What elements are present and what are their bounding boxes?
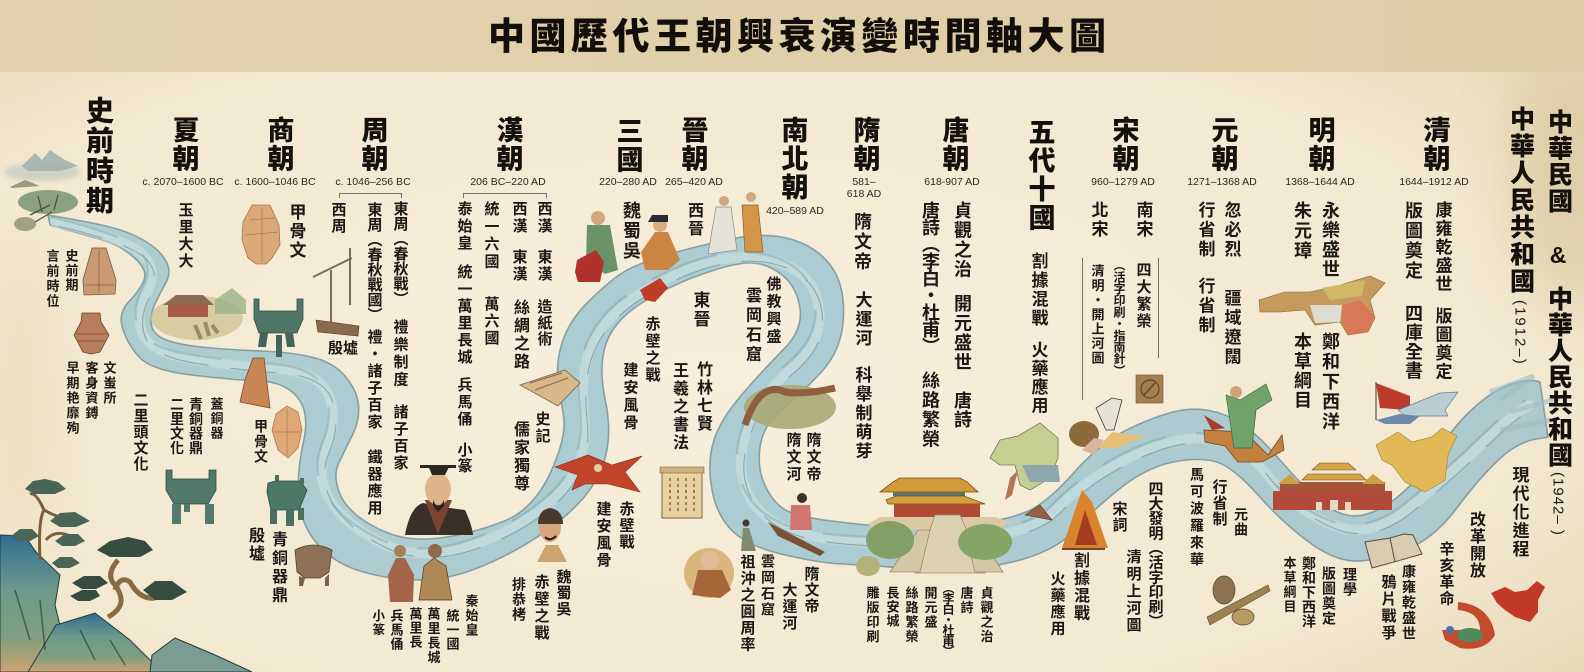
text: 四大發明（活字印刷）: 四大發明（活字印刷）: [1146, 481, 1164, 628]
icon: war bonfire: [1062, 490, 1108, 549]
date: Three Kingdoms: 220–280 AD: [599, 176, 657, 188]
text: 竹林七賢: 竹林七賢: [694, 361, 711, 433]
icon: oracle bone fragment: [240, 358, 270, 408]
text: 小篆: 小篆: [456, 442, 472, 474]
text: 雲岡石窟: 雲岡石窟: [743, 287, 760, 365]
heading: 周朝: 周朝: [358, 116, 388, 173]
date: Sui: 581–: [852, 176, 876, 188]
text: 二里頭文化: 二里頭文化: [132, 392, 148, 472]
text: 萬六國: 萬六國: [482, 296, 500, 347]
heading: ampersand: &: [1550, 242, 1566, 268]
date: 1942: (1942– ): [1550, 472, 1566, 536]
text: 雲岡石窟 lower: 雲岡石窟: [760, 554, 776, 618]
icon: Qin minister figure: [419, 544, 452, 600]
text: 四大繁榮: 四大繁榮: [1134, 262, 1152, 330]
icon: prehistoric stone axe: [83, 248, 116, 295]
icon: Five Dynasties map: [990, 423, 1060, 520]
text: （活字印刷・指南針）: （活字印刷・指南針）: [1112, 259, 1126, 376]
text: 割據混戰: 割據混戰: [1028, 252, 1048, 328]
line: Song divider left: [1082, 258, 1083, 400]
text: 清明・開上河圖: 清明・開上河圖: [1090, 264, 1104, 366]
text: 魏蜀吳: 魏蜀吳: [621, 201, 641, 261]
text: 史前期: 史前期: [64, 249, 78, 292]
text: 早期艳靡殉: 早期艳靡殉: [64, 361, 80, 436]
text: 西周: 西周: [330, 202, 346, 234]
icon: red China map: [1491, 581, 1545, 622]
text: 鴉片戰爭: 鴉片戰爭: [1380, 574, 1396, 642]
heading: 中華民國: 中華民國: [1544, 109, 1572, 214]
date: Ming: 1368–1644 AD: [1285, 176, 1355, 188]
icon: Erlitou palace site scene: [151, 288, 246, 340]
text: 隋文帝: 隋文帝: [852, 212, 872, 272]
icon: Bamboo Grove scholars: [708, 192, 763, 254]
text: 絲路繁榮 lower: 絲路繁榮: [904, 586, 918, 644]
text: 南宋: 南宋: [1134, 201, 1152, 239]
text: 清明上河圖: 清明上河圖: [1124, 549, 1142, 634]
icon: open book Compendium of Materia Medica: [1365, 534, 1422, 568]
icon: Ming territory map: [1259, 276, 1385, 335]
text: 行省制 lower: 行省制: [1210, 479, 1228, 527]
text: 鐵器應用: 鐵器應用: [366, 449, 382, 517]
date: Han: 206 BC–220 AD: [470, 176, 546, 188]
heading: 夏朝: 夏朝: [168, 116, 198, 173]
date: Zhou: c. 1046–256 BC: [335, 176, 411, 188]
title: 中國歷代王朝興衰演變時間軸大圖: [488, 16, 1110, 57]
text: 造紙術: 造紙術: [536, 299, 552, 347]
text: 禮・諸子百家: 禮・諸子百家: [366, 329, 382, 431]
date: Sui: [847, 176, 881, 200]
text: 赤壁戰: 赤壁戰: [618, 501, 634, 550]
text: 行省制 A: 行省制: [1196, 201, 1214, 260]
text: 甲骨文 lower: 甲骨文: [253, 419, 269, 464]
text: 火藥應用 lower: 火藥應用: [1048, 571, 1066, 637]
icon: oracle bone inscription: [272, 406, 302, 458]
text: 馬可波羅來華: 馬可波羅來華: [1189, 467, 1205, 569]
icon: Song flying lady: [1069, 398, 1145, 455]
text: 小篆 lower: 小篆: [370, 609, 384, 637]
text: 甲骨文: 甲骨文: [286, 203, 306, 260]
icon: Yinxu well sweep: [313, 248, 359, 336]
text: 言前時位: 言前時位: [44, 249, 60, 309]
heading: 中華人民共和國 right column: 中華人民共和國: [1544, 286, 1572, 468]
text: 諸子百家: 諸子百家: [392, 404, 408, 472]
icon: Tang palace: [856, 478, 1015, 576]
icon: Red Cliffs war banner: [555, 455, 642, 492]
text: 東漢 A: 東漢: [536, 249, 552, 283]
text: 祖沖之圓周率: 祖沖之圓周率: [738, 554, 756, 653]
text: 康雍乾盛世: 康雍乾盛世: [1432, 201, 1452, 294]
text: 理學: 理學: [1342, 567, 1358, 597]
text: 貞觀之治 lower: 貞觀之治: [978, 586, 994, 644]
icon: modern China map yellow: [1376, 428, 1457, 492]
text: 朱元璋: 朱元璋: [1292, 201, 1312, 261]
text: 絲綢之路: 絲綢之路: [511, 299, 528, 371]
text: 開元盛世: 開元盛世: [952, 294, 972, 372]
icon: left landscape mountains: [0, 535, 252, 672]
text: 史記: 史記: [534, 411, 550, 445]
text: 秦始皇 lower: 秦始皇: [464, 594, 478, 638]
icon: Cao Cao bust portrait: [537, 508, 567, 562]
text: 赤壁之戰: 赤壁之戰: [644, 316, 660, 384]
date: Song: 960–1279 AD: [1091, 176, 1155, 188]
icon: seated orange-robed scholar: [641, 215, 680, 270]
text: 宋詞: 宋詞: [1110, 501, 1128, 533]
icon: left pine tree: [11, 479, 90, 568]
icon: brown tripod cauldron: [295, 545, 332, 586]
text: 魏蜀吳 lower: 魏蜀吳: [554, 569, 572, 617]
text: 青銅器鼎 lower: 青銅器鼎: [269, 531, 286, 605]
date: Tang: 618-907 AD: [924, 176, 980, 188]
date: 1912: (1912–): [1512, 300, 1528, 366]
text: 四庫全書: 四庫全書: [1403, 304, 1423, 380]
text: 兵馬俑: 兵馬俑: [456, 377, 472, 428]
text: 西晉: 西晉: [685, 202, 702, 238]
text: 佛教興盛: 佛教興盛: [764, 276, 782, 346]
text: 絲路繁榮: 絲路繁榮: [920, 371, 940, 449]
text: 殷墟: 殷墟: [246, 527, 263, 563]
text: 鄭和下西洋 lower: 鄭和下西洋: [1301, 556, 1317, 628]
text: 版圖奠定 lower: 版圖奠定: [1321, 566, 1337, 626]
text: 隋文帝 lower: 隋文帝: [802, 566, 820, 614]
icon: Song compass and ruler: [1207, 576, 1270, 625]
icon: pine grove at river source: [14, 190, 78, 231]
date: Qing: 1644–1912 AD: [1399, 176, 1469, 188]
text: 康雍乾盛世 lower: 康雍乾盛世: [1401, 564, 1417, 642]
text: 隋文河: 隋文河: [784, 432, 802, 483]
icon: dragon with red flag emblem: [1442, 602, 1495, 649]
heading: 隋朝: 隋朝: [850, 116, 880, 173]
text: 唐詩（李白・杜甫）: 唐詩（李白・杜甫）: [920, 201, 940, 354]
icon: small monk figure: [741, 520, 756, 551]
heading: 晉朝: 晉朝: [678, 116, 708, 173]
bracket: Zhou: [339, 193, 402, 198]
text: 統一萬里長城: 統一萬里長城: [456, 264, 472, 366]
text: 東周（春秋戰）: 東周（春秋戰）: [392, 201, 408, 306]
icon: terracotta soldier: [388, 545, 414, 602]
heading: 五代十國: 五代十國: [1024, 118, 1054, 232]
heading: 三國: 三國: [612, 117, 642, 174]
text: 版圖奠定 A: 版圖奠定: [1403, 201, 1423, 281]
icon: painted clay pot: [74, 313, 109, 354]
heading: 中華人民共和國 left column: 中華人民共和國: [1506, 106, 1534, 295]
text: 割據混戰 lower: 割據混戰: [1071, 552, 1088, 622]
date: Xia: c. 2070–1600 BC: [142, 176, 224, 188]
text: 西漢 A: 西漢: [536, 201, 552, 235]
text: 萬里長: 萬里長: [408, 607, 422, 649]
heading: 元朝: 元朝: [1208, 116, 1238, 173]
icon: Song compass tile: [1136, 375, 1163, 403]
text: 蓋銅器: 蓋銅器: [208, 397, 224, 440]
icon: modern flag and airplane: [1376, 382, 1458, 424]
icon: distant misty mountains: [4, 150, 80, 188]
text: 赤壁之戰 lower: 赤壁之戰: [532, 574, 550, 642]
heading: 唐朝: 唐朝: [938, 116, 968, 173]
heading: 史前時期: 史前時期: [83, 96, 114, 216]
heading: 商朝: 商朝: [264, 116, 294, 173]
text: 雕版印刷: 雕版印刷: [864, 586, 880, 644]
title band: [0, 0, 1584, 72]
icon: right pine tree: [70, 537, 187, 617]
text: 唐詩: 唐詩: [952, 391, 972, 429]
text: 文蚩所: 文蚩所: [102, 361, 116, 406]
text: 大運河 lower: 大運河: [780, 582, 798, 632]
text: 本草綱目 lower: 本草綱目: [1282, 556, 1296, 614]
icon: Great Wall: [744, 385, 836, 429]
text: 行省制 B: 行省制: [1196, 277, 1214, 336]
text: 大運河: 大運河: [852, 291, 872, 348]
date: Sui: 618 AD: [847, 188, 881, 200]
text: 兵馬俑 lower: 兵馬俑: [388, 609, 404, 651]
icon: hanging scroll: [660, 467, 704, 518]
icon: round bronze ding: [166, 470, 216, 524]
text: 青銅器鼎: 青銅器鼎: [188, 397, 204, 455]
heading: 南北朝: 南北朝: [778, 116, 808, 202]
line: Song divider right: [1158, 258, 1159, 358]
icon: Bamboo book Shiji: [520, 370, 580, 406]
text: 東周（春秋戰國）: 東周（春秋戰國）: [366, 202, 382, 322]
icon: Tiananmen gate: [1273, 463, 1392, 510]
icon: Emperor Qin Shi Huang portrait: [405, 465, 473, 535]
text: 建安風骨 lower: 建安風骨: [594, 501, 612, 569]
text: 泰始皇: 泰始皇: [456, 201, 472, 252]
date: Jin: 265–420 AD: [665, 176, 723, 188]
text: 鄭和下西洋: 鄭和下西洋: [1320, 332, 1340, 432]
icon: bronze ding tripod: [254, 299, 303, 357]
text: 北宋: 北宋: [1088, 201, 1108, 239]
text: 西漢 B: 西漢: [510, 201, 528, 235]
text: 唐詩 lower: 唐詩: [958, 586, 974, 615]
text: 隋文帝 river: 隋文帝: [804, 432, 822, 483]
text: 長安城: 長安城: [884, 586, 900, 628]
heading: 漢朝: 漢朝: [492, 116, 522, 173]
text: 改革開放: 改革開放: [1467, 511, 1484, 579]
text: 排恭栲: 排恭栲: [511, 577, 527, 622]
text: 客身資鎛: 客身資鎛: [84, 361, 98, 421]
text: 統一國: 統一國: [444, 609, 460, 651]
text: 統一六國: 統一六國: [482, 201, 500, 271]
text: 萬里長城 lower: 萬里長城: [426, 607, 440, 665]
text: 殷墟 horizontal: 殷墟: [328, 340, 358, 357]
text: （李白・杜甫） lower: （李白・杜甫）: [941, 582, 955, 656]
heading: 清朝: 清朝: [1420, 116, 1450, 173]
river: [48, 215, 1560, 580]
icon: Yuan warrior on horse: [1204, 384, 1284, 462]
text: 火藥應用: 火藥應用: [1028, 341, 1048, 415]
text: 禮樂制度: 禮樂制度: [392, 319, 408, 389]
text: 貞觀之治: 貞觀之治: [952, 201, 972, 279]
text: 建安風骨: 建安風骨: [622, 362, 638, 432]
text: 儒家獨尊: 儒家獨尊: [511, 421, 528, 493]
text: 開元盛: 開元盛: [922, 586, 938, 630]
bracket: Han: [463, 193, 547, 198]
date: Shang: c. 1600–1046 BC: [234, 176, 316, 188]
text: 現代化進程: 現代化進程: [1510, 466, 1528, 558]
heading: 明朝: 明朝: [1304, 116, 1334, 173]
text: 疆域遼闊: 疆域遼闊: [1222, 289, 1240, 367]
icon: oracle bone turtle shell: [242, 205, 280, 264]
icon: Zu Chongzhi portrait medallion: [684, 548, 734, 598]
text: 東漢 B: 東漢: [510, 249, 528, 283]
text: 科舉制萌芽: 科舉制萌芽: [852, 366, 872, 461]
icon: Three Kingdoms official with red chest: [575, 211, 618, 282]
text: 東晉: 東晉: [690, 291, 710, 329]
date: Northern and Southern: 420–589 AD: [766, 205, 824, 217]
text: 忽必烈: 忽必烈: [1222, 201, 1240, 260]
icon: Sui emperor on canal boat: [768, 493, 825, 556]
heading: 宋朝: 宋朝: [1108, 116, 1138, 173]
text: 王羲之書法: 王羲之書法: [670, 362, 687, 452]
icon: square bronze ding: [267, 475, 307, 526]
text: 永樂盛世: 永樂盛世: [1320, 201, 1340, 279]
text: 元曲: 元曲: [1233, 507, 1249, 537]
text: 版圖奠定 B: 版圖奠定: [1432, 307, 1452, 381]
text: 玉里大大: 玉里大大: [176, 202, 194, 270]
date: Yuan: 1271–1368 AD: [1187, 176, 1257, 188]
text: 辛亥革命: 辛亥革命: [1438, 541, 1454, 607]
icon: fallen red armour: [640, 278, 668, 302]
text: 二里文化: 二里文化: [169, 397, 185, 455]
text: 本草綱目: 本草綱目: [1292, 332, 1312, 410]
